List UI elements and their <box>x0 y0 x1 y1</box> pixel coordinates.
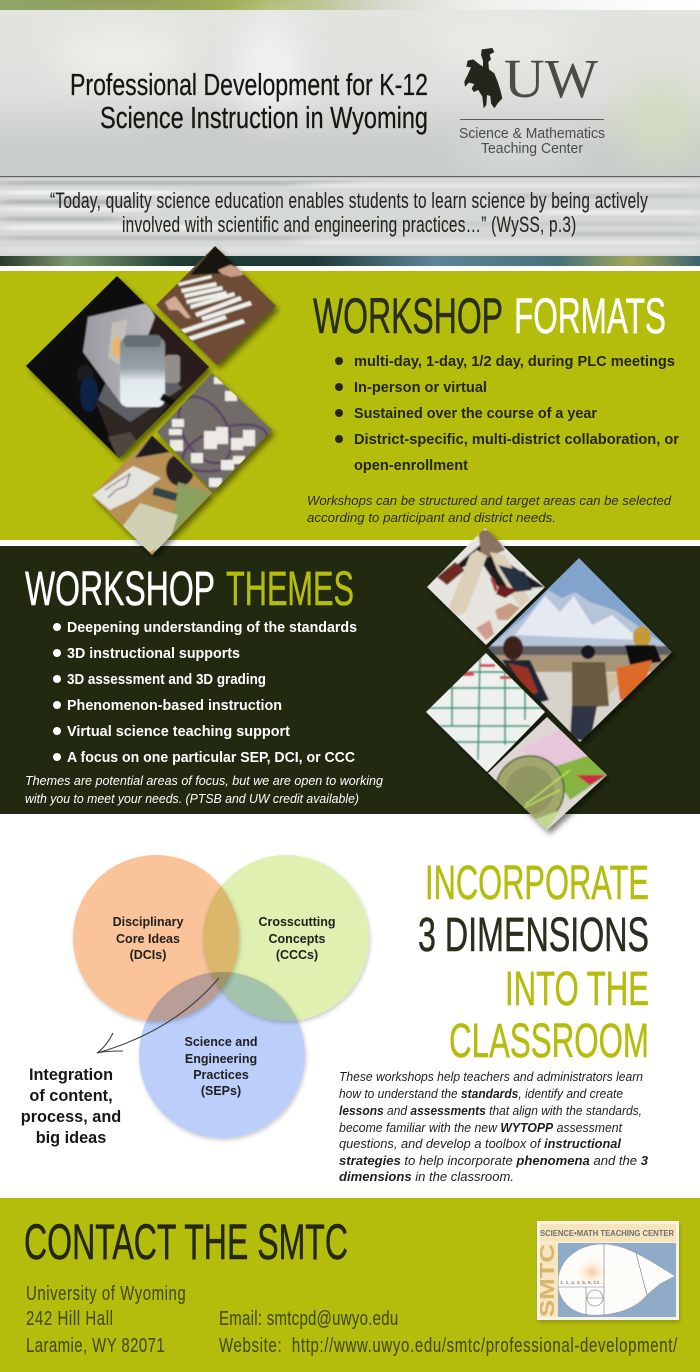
callout: integration of content <box>21 1066 121 1147</box>
bullet list: formats: open-enrollment <box>354 458 468 474</box>
callout: integration of content: Integration <box>29 1066 113 1084</box>
panel: contact <box>0 1198 700 1372</box>
text block: workshop description: These workshops help teachers and administrators learn <box>339 1070 643 1084</box>
bullet list: formats: Sustained over the course of a year <box>354 406 597 422</box>
quote from WySS <box>50 189 648 238</box>
panel: workshop themes <box>0 546 700 814</box>
logo caption: Science & Mathematics <box>459 126 605 142</box>
email and website: Email: smtcpd@uwyo.edu <box>219 1307 398 1330</box>
note: themes and credit: Themes are potential areas of focus, but we are open to working <box>25 774 383 788</box>
heading: page title <box>70 67 428 135</box>
photo: paper strips on table <box>150 240 280 370</box>
icon: bucking horse and rider <box>464 48 502 108</box>
label: SEPs: (SEPs) <box>201 1084 241 1098</box>
note: format flexibility <box>307 494 672 525</box>
Venn diagram: three dimensions <box>73 855 369 1138</box>
logo: SMTC shell: SMTC <box>537 1244 559 1317</box>
circle: science and engineering practices <box>139 972 305 1138</box>
label: DCIs: Disciplinary <box>113 915 183 929</box>
text block: workshop description: lessons and assessments that align with the standards, <box>339 1104 642 1118</box>
header banner <box>0 0 700 266</box>
label: CCCs: (CCCs) <box>276 948 318 962</box>
note: format flexibility: Workshops can be structured and target areas can be selected <box>307 494 672 508</box>
logo letters UW: UW <box>504 48 598 109</box>
text block: workshop description: how to understand the standards, identify and create <box>339 1087 623 1101</box>
callout: integration of content: big ideas <box>36 1129 106 1147</box>
text block: workshop description: questions, and develop a toolbox of instructional <box>339 1137 622 1151</box>
postal address: Laramie, WY 82071 <box>26 1334 165 1357</box>
photo collage: themes <box>422 524 676 834</box>
arrow: overlap to integration label <box>97 978 219 1053</box>
bullet list: formats: multi-day, 1-day, 1/2 day, during PLC meetings <box>354 354 675 370</box>
label: DCIs <box>113 915 183 962</box>
note: format flexibility: according to participant and district needs. <box>307 511 556 525</box>
email and website: Website: http://www.uwyo.edu/smtc/professional-development/ <box>219 1334 677 1357</box>
circle: crosscutting concepts <box>203 855 369 1021</box>
photo: mountain field trip <box>484 554 676 746</box>
shell shape <box>558 1244 675 1315</box>
heading: page title: Science Instruction in Wyoming <box>100 100 428 135</box>
bullet list: formats: In-person or virtual <box>354 380 487 396</box>
heading: incorporate 3 dimensions <box>418 857 649 1068</box>
logo: University of Wyoming <box>459 48 605 157</box>
heading: workshop formats: WORKSHOP <box>313 288 503 344</box>
photo: hand-drawn data table <box>422 650 550 776</box>
logo: SMTC shell: 1, 1, 2, 3, 5, 8, 13… <box>560 1280 604 1285</box>
text block: workshop description: dimensions in the classroom. <box>339 1170 514 1184</box>
photo collage: formats <box>20 240 280 560</box>
label: SEPs: Science and <box>185 1035 257 1049</box>
bullet list: themes: Deepening understanding of the standards <box>67 620 357 636</box>
bullet list: themes: Phenomenon-based instruction <box>67 698 282 714</box>
logo: SMTC shell <box>537 1221 679 1320</box>
bullet list: themes: Virtual science teaching support <box>67 724 290 740</box>
label: SEPs <box>185 1035 257 1098</box>
note: themes and credit: with you to meet your needs. (PTSB and UW credit available) <box>25 792 359 806</box>
bullet list: themes: 3D instructional supports <box>67 646 240 662</box>
postal address: 242 Hill Hall <box>26 1307 113 1330</box>
text block: workshop description: become familiar with the new WYTOPP assessment <box>339 1121 623 1135</box>
text block: workshop description <box>339 1070 648 1184</box>
callout: integration of content: of content, <box>29 1087 113 1105</box>
logo caption: Teaching Center <box>481 141 583 157</box>
heading: workshop themes: THEMES <box>226 563 354 616</box>
logo: SMTC shell: SCIENCE•MATH TEACHING CENTER <box>540 1229 674 1238</box>
bullet list: formats: District-specific, multi-district collaboration, or <box>354 432 679 448</box>
bullet list: themes <box>53 620 357 766</box>
postal address: University of Wyoming <box>26 1282 186 1305</box>
heading: contact the SMTC: CONTACT THE SMTC <box>24 1214 348 1270</box>
photo: laser through glass <box>484 712 612 834</box>
photo: jar experiment <box>20 270 215 465</box>
label: CCCs: Concepts <box>269 932 326 946</box>
quote from WySS: involved with scientific and engineering practices…” (WySS, p.3) <box>122 213 576 238</box>
photo: teachers writing on poster <box>427 528 546 648</box>
bullet list: formats <box>335 354 679 474</box>
quote from WySS: “Today, quality science education enables students to learn science by being actively <box>50 189 648 214</box>
callout: integration of content: process, and <box>21 1108 121 1126</box>
label: CCCs <box>258 915 336 962</box>
email and website <box>219 1307 677 1357</box>
bullet list: themes: 3D assessment and 3D grading <box>67 672 266 688</box>
label: DCIs: (DCIs) <box>130 948 166 962</box>
label: DCIs: Core Ideas <box>116 932 180 946</box>
note: themes and credit <box>25 774 383 806</box>
circle: disciplinary core ideas <box>73 855 239 1021</box>
label: SEPs: Practices <box>193 1068 249 1082</box>
photo: hoops with cards <box>150 368 278 498</box>
heading: page title: Professional Development for K-12 <box>70 67 428 102</box>
postal address <box>26 1282 186 1357</box>
logo caption <box>459 126 605 157</box>
bullet list: themes: A focus on one particular SEP, DCI, or CCC <box>67 750 356 766</box>
text block: workshop description: strategies to help incorporate phenomena and the 3 <box>339 1154 648 1168</box>
label: SEPs: Engineering <box>185 1052 257 1066</box>
heading: workshop themes: WORKSHOP <box>25 563 215 616</box>
panel: workshop formats <box>0 271 700 540</box>
label: CCCs: Crosscutting <box>258 915 336 929</box>
photo: students with papers <box>88 430 216 560</box>
